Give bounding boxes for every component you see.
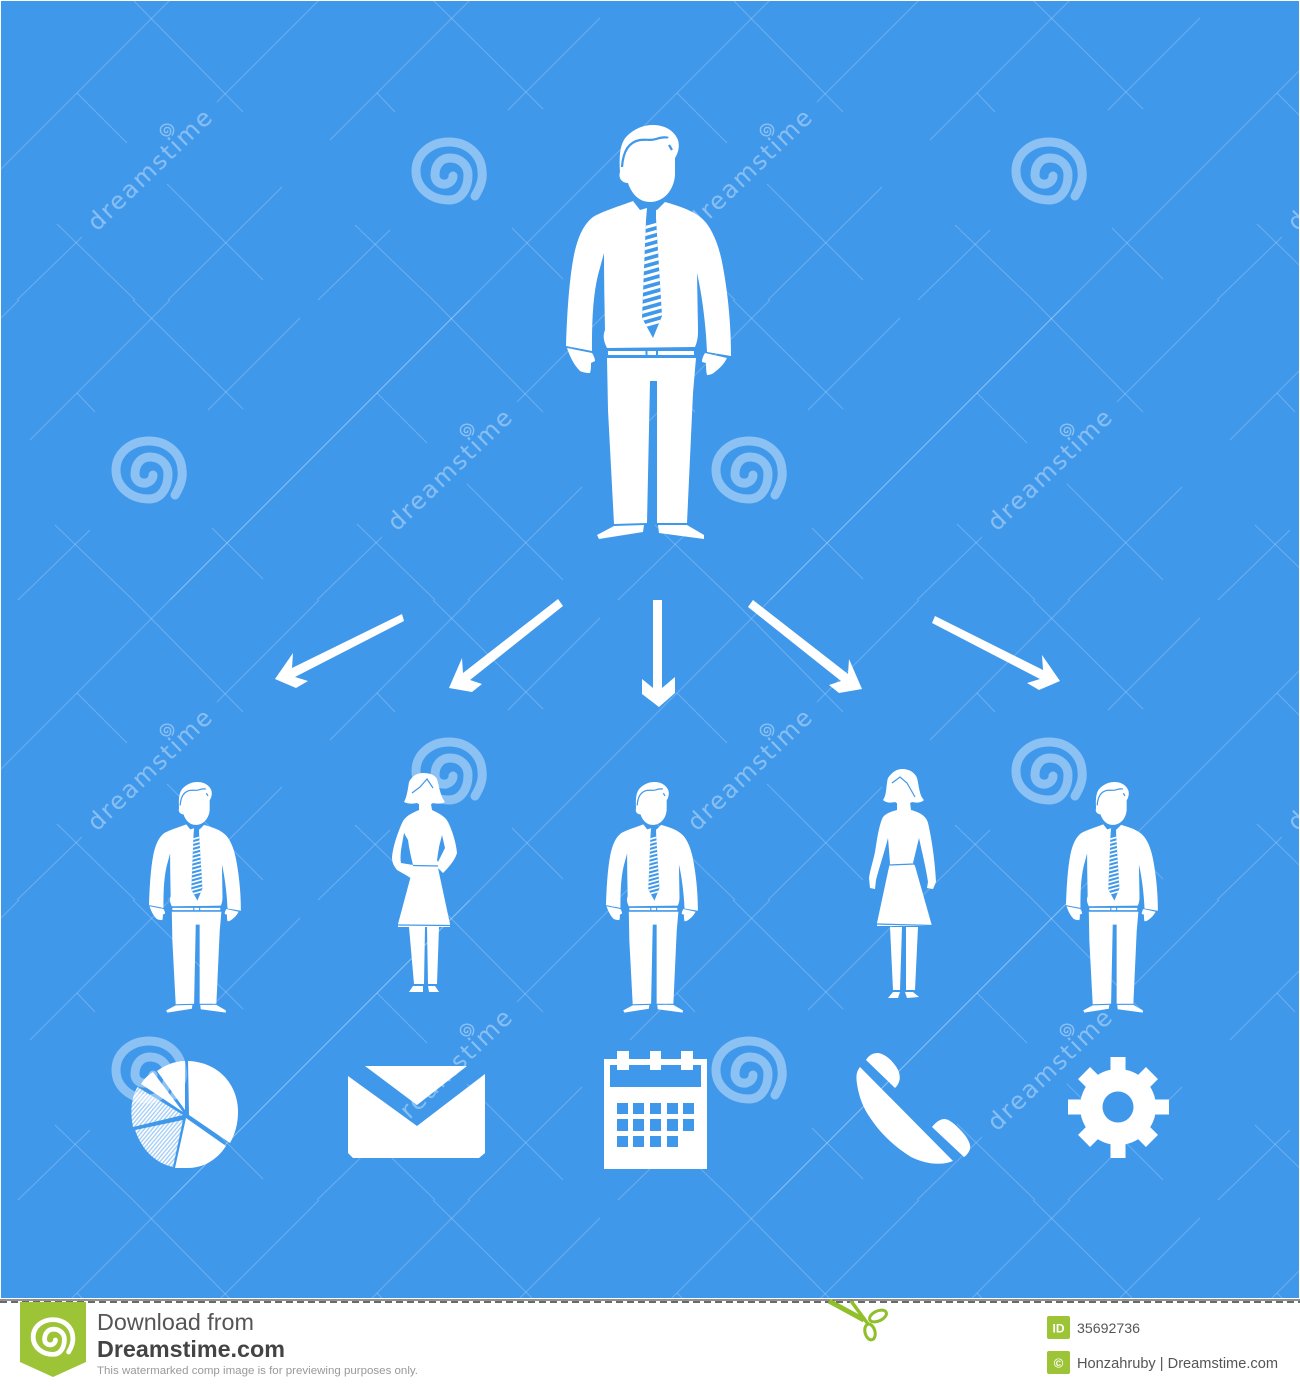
image id: 35692736 [1077,1320,1140,1336]
watermarks: dreamstime [382,1004,518,1136]
footer note: This watermarked comp image is for previewing purposes only. [97,1365,418,1377]
watermarks: dreamstime [682,104,818,236]
icon: pie chart [131,1061,238,1168]
icon: envelope [348,1066,485,1158]
icon: gear [1068,1057,1169,1158]
employee: man right [1066,782,1158,1013]
icon: scissors [829,1301,888,1341]
watermarks: dreamstime [982,404,1118,536]
watermarks: dreamstime [82,104,218,236]
watermarks: dreamstime [982,1004,1118,1136]
icon: telephone handset [856,1053,970,1164]
icon: calendar [604,1051,707,1169]
id badge [1047,1316,1070,1339]
author credit: Honzahruby | Dreamstime.com [1077,1356,1278,1372]
watermarks: dreamstime [82,704,218,836]
employee: woman with hands on hips [392,773,457,992]
arrow: to fifth employee [932,616,1060,690]
copyright badge: © [1054,1356,1064,1370]
footer heading: Dreamstime.com: Dreamstime.com [97,1336,285,1362]
arrow: to fourth employee [748,600,862,693]
watermarks: dreamstime [382,404,518,536]
footer heading: download from: Download from [97,1309,254,1335]
watermarks [82,104,1300,1136]
arrow: to second employee [449,599,563,692]
cut line [0,1300,1300,1302]
employee: man centre [606,782,698,1013]
copyright badge [1047,1351,1070,1374]
employee: woman with arms down [869,769,936,998]
manager figure [566,125,731,539]
watermarks: dreamstime [682,704,818,836]
employee: man left [149,782,241,1013]
arrow: to first employee [275,614,404,688]
id badge: ID [1052,1322,1065,1336]
footer badge [20,1302,86,1377]
arrow: to third employee [642,600,675,707]
